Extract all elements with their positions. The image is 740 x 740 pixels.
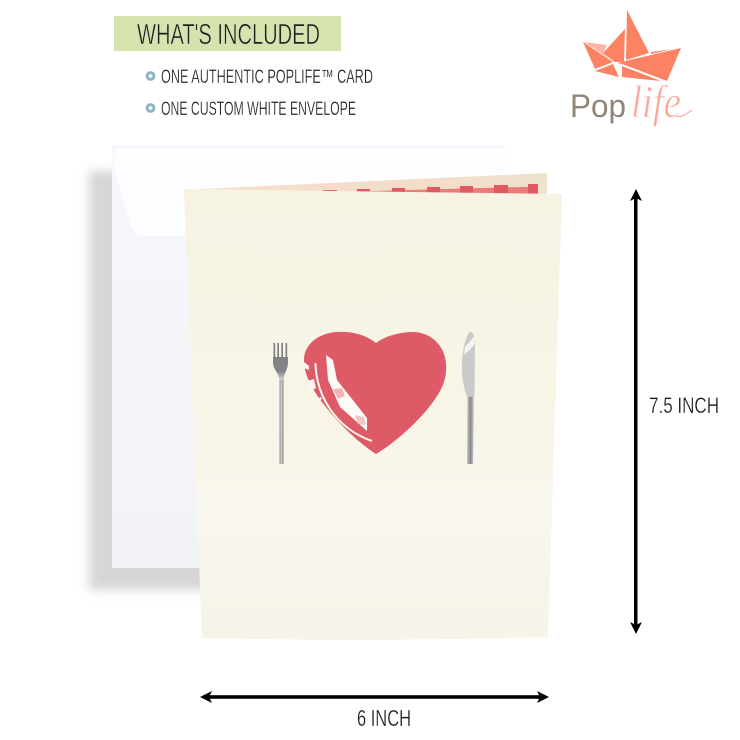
heart highlight xyxy=(326,355,367,431)
wordmark: life xyxy=(631,76,681,127)
card front xyxy=(184,189,562,640)
heart xyxy=(304,332,446,454)
wordmark: Pop xyxy=(570,88,626,124)
item: one authentic card: ONE AUTHENTIC POPLIFE™ CARD xyxy=(161,67,373,88)
wordmark xyxy=(570,76,692,127)
envelope shadow xyxy=(89,171,219,590)
envelope flap xyxy=(112,148,505,236)
label: height: 7.5 INCH xyxy=(649,393,719,418)
item: one envelope xyxy=(147,99,356,120)
red pop-up stripe xyxy=(300,184,538,197)
item: one envelope: ONE CUSTOM WHITE ENVELOPE xyxy=(161,99,356,120)
panel: what's included heading xyxy=(114,16,341,51)
list: included items xyxy=(147,67,373,120)
logo: Poplife xyxy=(570,10,692,127)
label: width: 6 INCH xyxy=(357,705,411,731)
arrow: width dimension xyxy=(200,691,549,703)
arrow: height dimension xyxy=(630,189,642,634)
item: one authentic card xyxy=(147,67,373,88)
icon: fork xyxy=(273,343,288,464)
panel: what's included heading: WHAT'S INCLUDED xyxy=(137,19,320,51)
envelope xyxy=(89,145,505,590)
icon: origami boat xyxy=(583,10,681,81)
envelope body xyxy=(112,145,505,568)
icon: knife xyxy=(462,332,475,464)
card back panel xyxy=(200,173,547,197)
